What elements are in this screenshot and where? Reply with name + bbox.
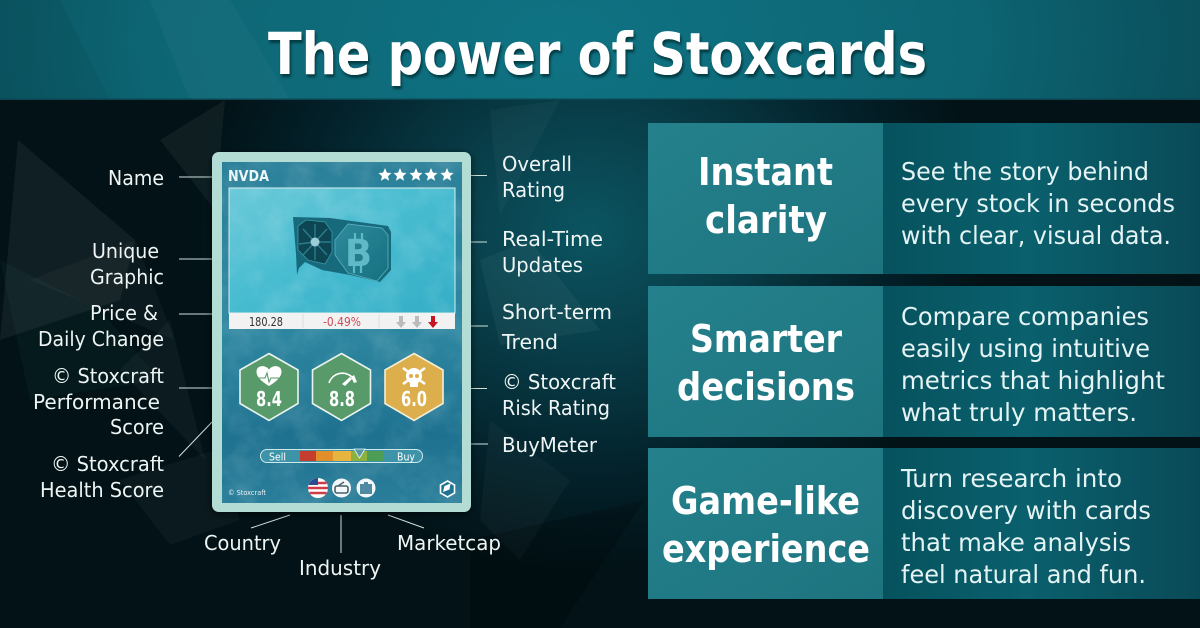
icon: graphics card with bitcoin: B <box>345 232 372 275</box>
right labels with connector lines: Trend <box>501 330 558 354</box>
heading: decisions <box>677 365 855 409</box>
price strip: -0.49% <box>323 315 361 329</box>
right labels with connector lines: © Stoxcraft <box>502 370 616 394</box>
bottom labels with connector lines: Country <box>204 531 281 555</box>
left labels with connector lines: Performance <box>33 390 160 414</box>
stock card <box>212 152 471 512</box>
health score hexagon: 8.8 <box>329 387 355 411</box>
left labels with connector lines: Unique <box>92 239 159 263</box>
heading <box>677 317 855 409</box>
risk rating hexagon: 6.0 <box>401 387 427 411</box>
description: See the story behind <box>901 157 1149 186</box>
description: Turn research into <box>900 464 1122 493</box>
right labels with connector lines <box>471 152 616 457</box>
left labels with connector lines: Daily Change <box>38 327 164 351</box>
description <box>901 157 1175 250</box>
right labels with connector lines: Overall <box>502 152 572 176</box>
heading: Smarter <box>690 317 842 361</box>
description: with clear, visual data. <box>901 221 1171 250</box>
right labels with connector lines: BuyMeter <box>502 433 598 457</box>
risk rating hexagon <box>385 354 443 420</box>
panel: game-like experience <box>648 448 1200 599</box>
description: that make analysis <box>901 528 1131 557</box>
icon: marketcap <box>356 478 376 498</box>
performance score hexagon: 8.4 <box>256 387 282 411</box>
copyright text: © Stoxcraft <box>228 489 266 497</box>
health score hexagon <box>312 354 370 420</box>
panel: instant clarity <box>648 123 1200 274</box>
left labels with connector lines: Price & <box>90 301 158 325</box>
description: discovery with cards <box>901 496 1151 525</box>
description: metrics that highlight <box>901 366 1165 395</box>
unique graphic panel <box>229 188 455 313</box>
buymeter <box>260 449 422 464</box>
star rating <box>378 168 454 181</box>
bottom labels with connector lines: Industry <box>299 556 381 580</box>
right labels with connector lines: Rating <box>502 178 565 202</box>
heading <box>698 150 833 242</box>
heading: Instant <box>698 150 833 194</box>
heading: experience <box>662 527 870 571</box>
trend arrows <box>396 316 438 328</box>
right labels with connector lines: Risk Rating <box>502 396 610 420</box>
description: feel natural and fun. <box>901 560 1146 589</box>
buymeter: Sell <box>269 452 286 464</box>
fan blades <box>299 224 331 260</box>
left labels with connector lines: © Stoxcraft <box>52 364 164 388</box>
icon: brand hexagon <box>440 481 454 497</box>
description: every stock in seconds <box>901 189 1175 218</box>
icon: graphics card with bitcoin <box>293 217 391 282</box>
description <box>901 302 1165 427</box>
buymeter: Buy <box>397 452 415 464</box>
left labels with connector lines: Health Score <box>40 478 164 502</box>
bottom labels with connector lines: Marketcap <box>397 531 501 555</box>
description: Compare companies <box>901 302 1149 331</box>
left labels with connector lines: Score <box>110 415 164 439</box>
left labels with connector lines <box>33 166 212 502</box>
icon: industry <box>332 478 351 498</box>
price strip: 180.28 <box>249 315 283 329</box>
left labels with connector lines: Graphic <box>90 265 164 289</box>
title band <box>0 0 1200 100</box>
performance score hexagon <box>240 354 298 420</box>
icon: US flag <box>308 478 328 498</box>
description <box>900 464 1151 589</box>
left labels with connector lines: Name <box>108 166 164 190</box>
description: easily using intuitive <box>901 334 1150 363</box>
price strip <box>229 313 455 329</box>
heading <box>662 479 870 571</box>
description: what truly matters. <box>901 398 1137 427</box>
right labels with connector lines: Short-term <box>502 300 612 324</box>
right labels with connector lines: Real-Time <box>502 227 603 251</box>
heading: Game-like <box>671 479 860 523</box>
panel: smarter decisions <box>648 286 1200 437</box>
title: The power of Stoxcards <box>268 20 927 88</box>
left labels with connector lines: © Stoxcraft <box>51 452 164 476</box>
heading: clarity <box>705 198 827 242</box>
card name: NVDA <box>228 167 269 185</box>
right labels with connector lines: Updates <box>502 253 583 277</box>
bottom labels with connector lines <box>204 515 501 580</box>
